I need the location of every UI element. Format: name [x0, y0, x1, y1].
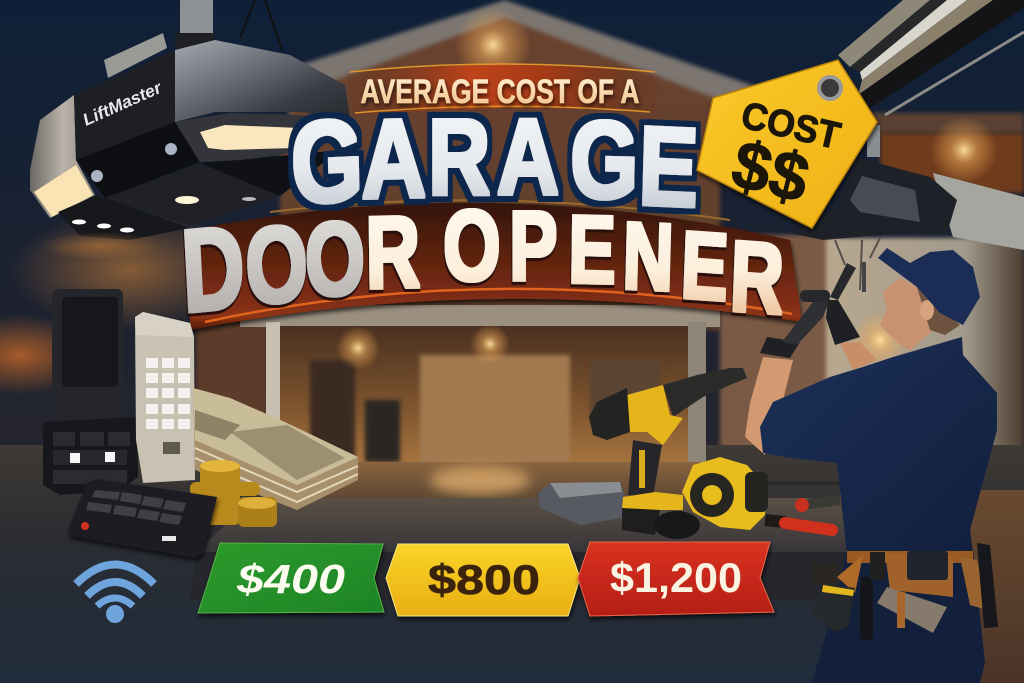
garage door opener unit — [30, 0, 350, 260]
price badge: mid — [386, 544, 580, 616]
price badge: low — [198, 543, 384, 613]
counter — [190, 498, 848, 600]
price tag: cost: $$ — [725, 126, 816, 218]
technician — [745, 248, 998, 683]
drill — [589, 368, 747, 535]
top ribbon — [345, 65, 660, 116]
price badge: mid: $800 — [428, 556, 540, 603]
title line 2: G — [569, 99, 639, 223]
rail and motor — [790, 0, 1024, 290]
brand label: LiftMaster — [80, 78, 166, 130]
tools on counter — [538, 368, 840, 539]
title line 3: R — [365, 196, 421, 311]
coin stacks — [190, 460, 277, 527]
shirt — [760, 337, 997, 555]
far arm — [840, 342, 877, 370]
cash and coins — [190, 388, 358, 527]
title line 3: P — [509, 192, 557, 302]
price badge: high — [578, 542, 774, 616]
price tag: cost — [697, 60, 877, 228]
title line 2: E — [637, 104, 700, 231]
title line 1: AVERAGE COST OF A — [360, 73, 640, 111]
head — [880, 278, 937, 350]
title line 2: G — [289, 96, 365, 228]
near forearm — [745, 357, 793, 455]
main arched banner — [190, 203, 802, 330]
title line 3: D — [179, 201, 248, 337]
tape measure — [682, 457, 768, 530]
garage interior — [240, 305, 720, 500]
sensor unit — [43, 417, 138, 495]
wall control and accessories — [43, 289, 195, 495]
title line 3: R — [728, 219, 786, 335]
title line 3: O — [443, 189, 501, 302]
screwdrivers — [765, 483, 840, 530]
title line 3: O — [304, 200, 366, 319]
price tag: cost: COST — [737, 95, 844, 158]
pants — [812, 550, 985, 683]
gloves and wrench — [760, 262, 866, 358]
title line 2: A — [497, 96, 559, 217]
title line 2: A — [360, 96, 427, 222]
wireless keypad — [52, 289, 123, 419]
remote — [68, 479, 217, 558]
title line 3: E — [568, 196, 617, 304]
price badge: high: $1,200 — [610, 554, 742, 601]
cap — [878, 248, 980, 325]
title line 3: E — [679, 211, 730, 321]
price badge: low: $400 — [236, 556, 345, 602]
title line 3: O — [243, 203, 310, 328]
title line 2: R — [428, 96, 490, 217]
title banner — [179, 64, 802, 337]
white keypad — [135, 312, 195, 483]
tool belt — [812, 543, 998, 640]
title line 3: N — [621, 202, 675, 311]
charger — [538, 482, 625, 525]
wifi icon — [76, 564, 154, 623]
